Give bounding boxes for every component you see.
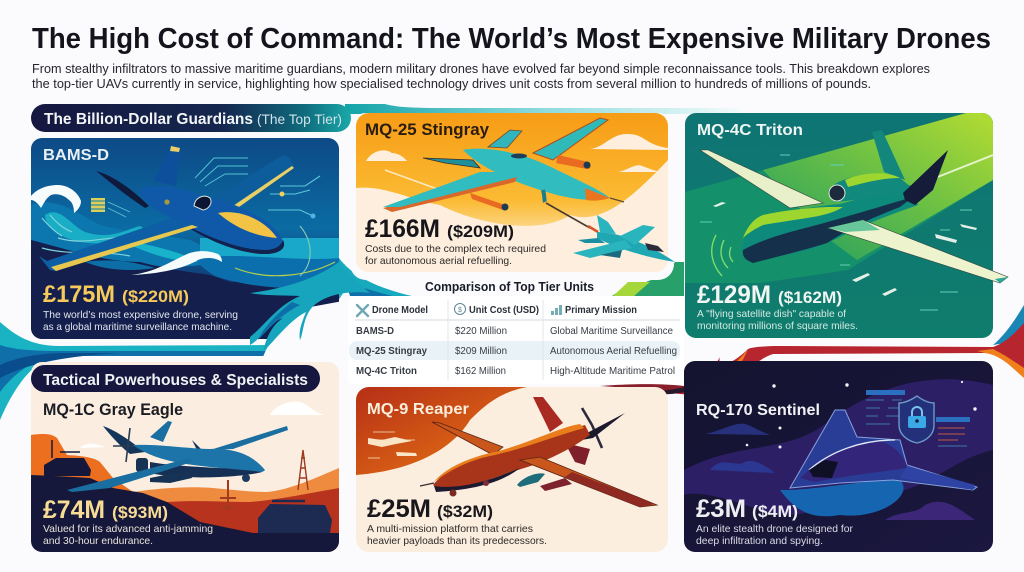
description: BAMS-D: as a global maritime surveillance machine. <box>43 322 232 333</box>
label: MQ-25: MQ-25 Stingray <box>365 120 490 139</box>
description: MQ-4C: monitoring millions of square miles. <box>697 321 858 332</box>
icon: security shield <box>899 396 934 443</box>
title: The High Cost of Command: The World’s Most Expensive Military Drones <box>32 23 991 55</box>
icon: bars <box>551 305 562 315</box>
price: MQ-25: ($209M) <box>447 223 514 241</box>
label: MQ-4C: MQ-4C Triton <box>697 122 803 139</box>
table row: BAMS-D: BAMS-D <box>356 326 394 337</box>
table row: MQ-4C: MQ-4C Triton <box>356 366 417 377</box>
ribbon: teal top and side swooshes <box>0 104 1024 420</box>
price: MQ-9: ($32M) <box>437 503 493 521</box>
description: MQ-4C: A "flying satellite dish" capable of <box>697 309 846 320</box>
description: MQ-1C: Valued for its advanced anti-jamming <box>43 524 213 535</box>
price: MQ-1C: £74M <box>43 496 105 524</box>
swoosh over BAMS-D corner <box>250 262 370 360</box>
price: MQ-4C: ($162M) <box>778 289 842 307</box>
description: RQ-170: An elite stealth drone designed for <box>696 524 854 535</box>
intro text: From stealthy infiltrators to massive maritime guardians, modern military drones have evolved far beyond simple reconnaissance tools. This breakdown explores <box>32 62 930 76</box>
icon: coin <box>454 304 466 314</box>
table row: MQ-25: MQ-25 Stingray <box>356 346 427 357</box>
drone: receiver jet <box>573 215 675 262</box>
panel: MQ-4C Triton <box>685 113 1008 338</box>
drone: MQ-9 <box>420 397 657 507</box>
price: RQ-170: ($4M) <box>752 503 798 521</box>
label: MQ-9: MQ-9 Reaper <box>367 401 469 418</box>
panel: MQ-1C Gray Eagle <box>31 362 339 552</box>
table row: MQ-4C: High-Altitude Maritime Patrol <box>550 366 675 377</box>
price: MQ-25: £166M <box>365 215 440 243</box>
table header: Drone Model <box>372 305 428 316</box>
heading: billion-dollar guardians: (The Top Tier) <box>257 112 342 127</box>
icon: coin: $ <box>458 307 462 314</box>
price: RQ-170: £3M <box>696 495 746 523</box>
description: MQ-9: A multi-mission platform that carries <box>367 524 533 535</box>
description: RQ-170: deep infiltration and spying. <box>696 536 823 547</box>
drone: BAMS-D <box>39 146 294 271</box>
table header: Primary Mission <box>565 305 637 316</box>
table header: Unit Cost (USD) <box>469 305 539 316</box>
drone: RQ-170 <box>790 410 977 490</box>
panel: RQ-170 Sentinel <box>684 361 993 552</box>
label: BAMS-D: BAMS-D <box>43 147 109 164</box>
panel: MQ-25 Stingray <box>356 113 675 272</box>
price: MQ-9: £25M <box>367 495 431 523</box>
heading: billion-dollar guardians: The Billion-Dollar Guardians <box>44 111 253 128</box>
label: RQ-170: RQ-170 Sentinel <box>696 402 820 419</box>
price: MQ-4C: £129M <box>697 281 771 309</box>
table row: BAMS-D: Global Maritime Surveillance <box>550 326 673 337</box>
heading: comparison table: Comparison of Top Tier Units <box>425 280 594 294</box>
drone: MQ-4C <box>700 130 1008 283</box>
table row: MQ-25: $209 Million <box>455 346 507 357</box>
heading: billion-dollar guardians <box>31 104 351 132</box>
intro text: the top-tier UAVs currently in service, highlighting how specialised technology drives unit costs from several million to hundreds of millions of pounds. <box>32 77 871 91</box>
panel: BAMS-D <box>31 138 370 360</box>
price: BAMS-D: £175M <box>43 281 115 308</box>
table row: MQ-4C: $162 Million <box>455 366 506 377</box>
table row: BAMS-D: $220 Million <box>455 326 507 337</box>
label: MQ-1C: MQ-1C Gray Eagle <box>43 401 183 419</box>
panel: MQ-9 Reaper <box>356 387 668 552</box>
drone: MQ-1C <box>67 421 288 492</box>
heading: tactical powerhouses <box>31 365 320 392</box>
ribbon: red and orange swoosh <box>600 323 1024 395</box>
drone: MQ-25 <box>383 118 675 262</box>
halo behind Stingray panel <box>350 113 674 280</box>
description: MQ-9: heavier payloads than its predecessors. <box>367 536 547 547</box>
price: MQ-1C: ($93M) <box>112 504 168 522</box>
description: MQ-25: for autonomous aerial refuelling. <box>365 256 512 267</box>
icon: drone <box>357 305 368 316</box>
description: BAMS-D: The world’s most expensive drone, serving <box>43 310 238 321</box>
description: MQ-1C: and 30-hour endurance. <box>43 536 153 547</box>
description: MQ-25: Costs due to the complex tech required <box>365 244 546 255</box>
heading: tactical powerhouses: Tactical Powerhouses & Specialists <box>43 372 308 389</box>
table: top tier comparison <box>348 296 684 384</box>
table row: MQ-25: Autonomous Aerial Refuelling <box>550 346 677 357</box>
price: BAMS-D: ($220M) <box>122 288 189 306</box>
